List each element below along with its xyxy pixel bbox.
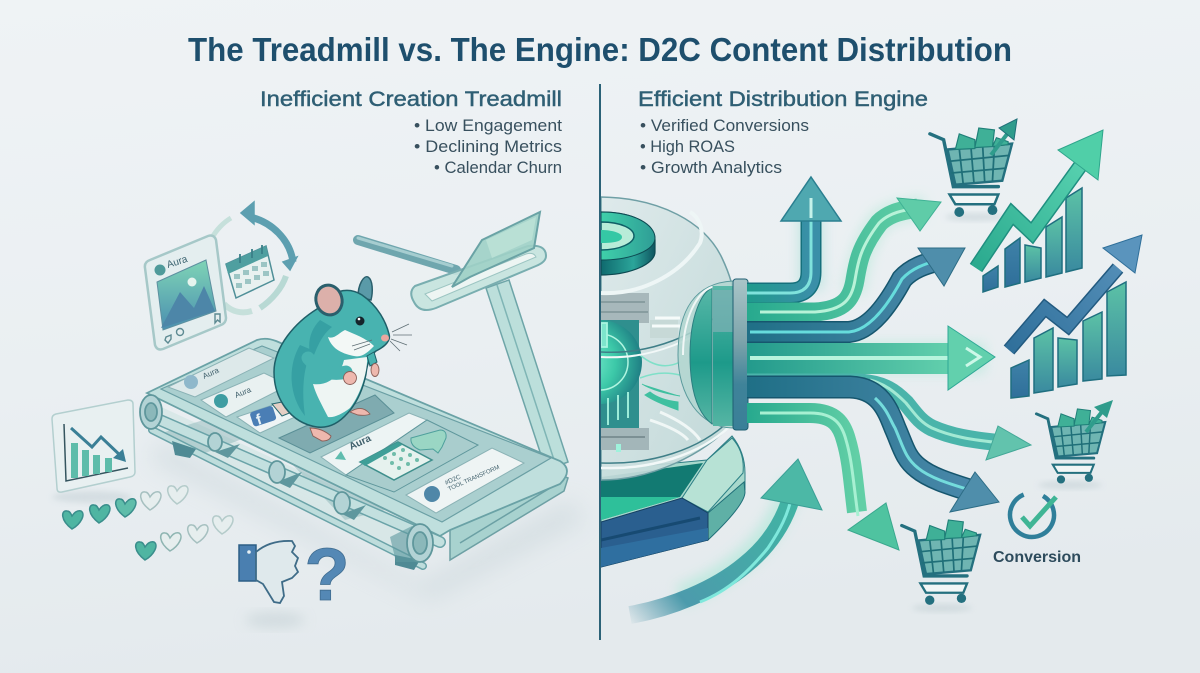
content cards on belt: Aura	[233, 385, 253, 400]
icon: calendar	[226, 245, 274, 298]
engine	[601, 196, 748, 568]
bullet list: engine benefits	[640, 116, 809, 177]
title: The Treadmill vs. The Engine: D2C Content Distribution	[188, 31, 1012, 68]
hamster paws and feet	[310, 364, 379, 441]
arrow: incoming swoosh	[630, 459, 822, 615]
content cards on belt: TOOL TRANSFORM	[447, 465, 501, 493]
hamster belly	[313, 357, 367, 417]
hearts: row one	[63, 486, 188, 529]
bullet list: engine benefits: • Growth Analytics	[640, 158, 782, 177]
treadmill	[140, 212, 568, 570]
icon: content cycle arrows	[212, 202, 297, 312]
bullet list: treadmill problems: • Calendar Churn	[434, 158, 562, 177]
arrow: green upper	[747, 198, 941, 312]
arrow: blue upper	[747, 248, 965, 332]
arrow: up to top	[747, 177, 841, 293]
panel: creation treadmill	[52, 88, 585, 628]
engine core	[601, 293, 701, 452]
cart arrow	[1086, 408, 1105, 432]
hamster near ear	[313, 282, 345, 318]
engine flange	[733, 279, 748, 430]
arrow glows	[680, 205, 985, 596]
cart arrow	[991, 129, 1011, 155]
label: conversion: Conversion	[993, 549, 1081, 566]
arrow: main straight	[747, 326, 995, 390]
content cards on belt: f	[254, 411, 265, 429]
bullet list: engine benefits: • High ROAS	[640, 137, 735, 156]
arrow: teal lower	[747, 380, 1031, 460]
hamster body	[274, 290, 389, 427]
icon: social post card: Aura	[166, 254, 189, 271]
icon: conversion check	[1002, 485, 1062, 545]
icon: shopping cart top	[930, 119, 1017, 221]
engine glass bands	[601, 212, 732, 468]
hamster whiskers	[352, 324, 412, 351]
engine top ring	[601, 212, 655, 275]
hamster arm	[308, 358, 346, 373]
engine glass dome	[601, 197, 734, 480]
content cards on belt: Aura	[201, 366, 221, 381]
content cards on belt: Aura	[348, 433, 373, 453]
chart card: declining metrics	[52, 400, 135, 503]
treadmill rollers	[140, 395, 433, 562]
icon: thumbs down	[239, 541, 305, 628]
content cards on belt: #D2C	[444, 474, 462, 487]
green trend arrow	[976, 165, 1081, 268]
icon: shopping cart middle	[1036, 400, 1113, 489]
hamster back foot	[272, 402, 292, 416]
divider	[599, 84, 601, 640]
hamster eye and nose	[356, 316, 364, 326]
hamster far ear	[358, 277, 372, 300]
treadmill upright and console	[358, 212, 568, 470]
hamster	[272, 277, 412, 441]
arrow: blue lower	[747, 387, 999, 512]
hamster cheek	[328, 330, 374, 356]
bullet list: treadmill problems: • Declining Metrics	[414, 137, 562, 156]
bullet list: treadmill problems	[414, 116, 562, 177]
chart: blue growth	[1009, 235, 1142, 398]
content cards on belt	[168, 348, 524, 513]
treadmill belt frame	[146, 339, 568, 570]
treadmill ground shadow	[150, 440, 585, 600]
panel: distribution engine	[558, 88, 1142, 615]
icon: social post card	[145, 236, 226, 350]
heading: efficient distribution engine: Efficient Distribution Engine	[638, 88, 928, 111]
blue trend arrow	[1009, 268, 1118, 350]
engine piston	[678, 281, 733, 428]
icon: shopping cart bottom	[902, 520, 980, 612]
bullet list: treadmill problems: • Low Engagement	[414, 116, 562, 135]
icon: question mark: ?	[304, 533, 350, 616]
arrow: green lower	[747, 413, 899, 550]
treadmill feet	[172, 441, 420, 570]
engine base	[601, 436, 745, 567]
hearts: row two	[136, 516, 233, 560]
heading: inefficient creation treadmill: Inefficient Creation Treadmill	[260, 88, 562, 111]
chart: green growth	[976, 130, 1103, 292]
bullet list: engine benefits: • Verified Conversions	[640, 116, 809, 135]
hamster fur shading	[292, 320, 332, 416]
